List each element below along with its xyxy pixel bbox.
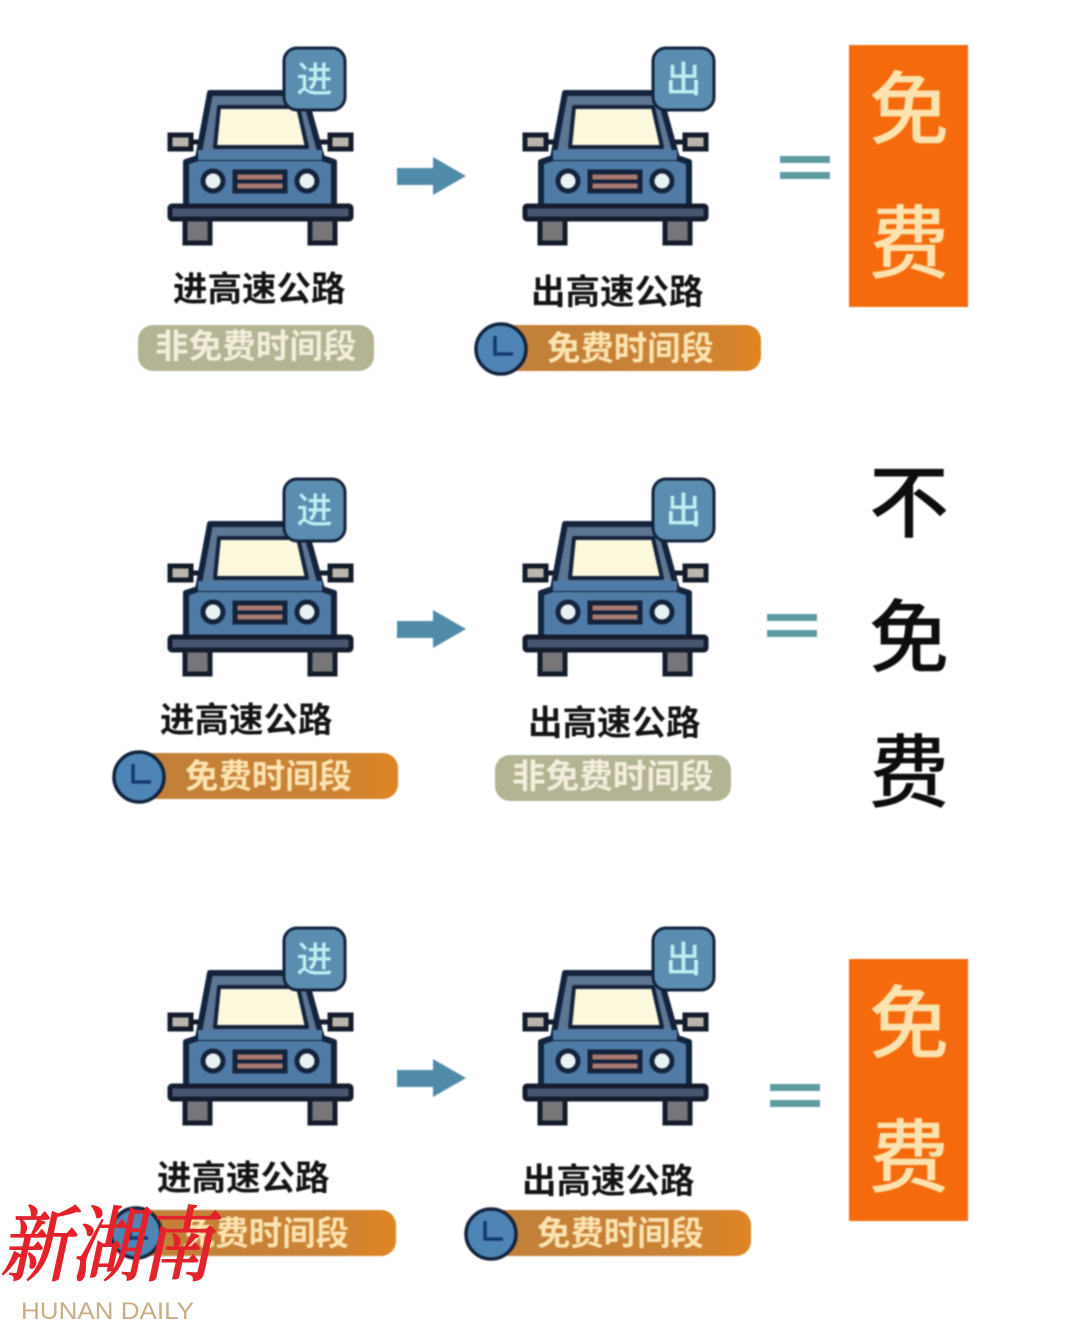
result: free: 免	[869, 66, 949, 155]
badge: enter: 进	[296, 59, 333, 100]
pill: free period with clock: 免费时间段	[185, 759, 352, 796]
result: not free: 费	[869, 729, 949, 818]
result: free	[849, 959, 968, 1221]
icon: car entering	[170, 93, 351, 243]
pill: non-free period: 非免费时间段	[155, 328, 356, 366]
pill: free period with clock	[111, 1208, 396, 1258]
icon: car exiting	[525, 524, 706, 674]
badge: exit	[653, 928, 714, 990]
icon: car exiting	[525, 973, 706, 1123]
label: exit expressway: 出高速公路	[531, 274, 704, 312]
badge: enter: 进	[296, 939, 333, 980]
badge: exit: 出	[665, 490, 702, 531]
badge: enter	[284, 479, 345, 541]
badge: exit	[653, 48, 714, 110]
badge: enter	[284, 48, 345, 110]
icon: car exiting	[525, 93, 706, 243]
label: enter expressway: 进高速公路	[173, 271, 346, 309]
icon: car entering	[170, 524, 351, 674]
result: free: 费	[869, 200, 949, 289]
result: not free: 不	[869, 459, 949, 548]
result: free: 费	[869, 1114, 949, 1203]
logo calligraphy: 新湖南	[0, 1181, 221, 1298]
row 3: enter free, exit free, result free	[111, 928, 968, 1259]
pill: non-free period	[495, 755, 731, 801]
watermark: Hunan Daily logo	[0, 1181, 221, 1323]
arrow	[397, 610, 466, 648]
row 2: enter free, exit non-free, result not free	[114, 459, 949, 818]
badge: exit: 出	[665, 59, 702, 100]
equals sign	[770, 1084, 820, 1107]
result: not free	[869, 459, 949, 818]
label: exit expressway: 出高速公路	[528, 705, 701, 743]
arrow	[397, 157, 466, 195]
row 1: enter non-free, exit free, result free	[138, 45, 968, 374]
arrow	[397, 1059, 466, 1097]
badge: exit	[653, 479, 714, 541]
pill: free period with clock: 免费时间段	[547, 331, 714, 368]
pill: free period with clock	[114, 752, 398, 802]
pill: non-free period	[138, 325, 374, 371]
pill: non-free period: 非免费时间段	[512, 758, 713, 796]
pill: free period with clock: 免费时间段	[182, 1216, 349, 1253]
badge: enter	[284, 928, 345, 990]
equals sign	[767, 614, 817, 637]
result: not free: 免	[869, 594, 949, 683]
pill: free period with clock: 免费时间段	[537, 1216, 704, 1253]
badge: exit: 出	[665, 939, 702, 980]
result: free	[849, 45, 968, 307]
equals sign	[780, 156, 830, 179]
label: enter expressway: 进高速公路	[157, 1160, 330, 1198]
result: free: 免	[869, 980, 949, 1069]
label: enter expressway: 进高速公路	[160, 702, 333, 740]
pill: free period with clock	[476, 324, 761, 374]
badge: enter: 进	[296, 490, 333, 531]
label: exit expressway: 出高速公路	[522, 1163, 695, 1201]
pill: free period with clock	[466, 1209, 751, 1259]
icon: car entering	[170, 973, 351, 1123]
